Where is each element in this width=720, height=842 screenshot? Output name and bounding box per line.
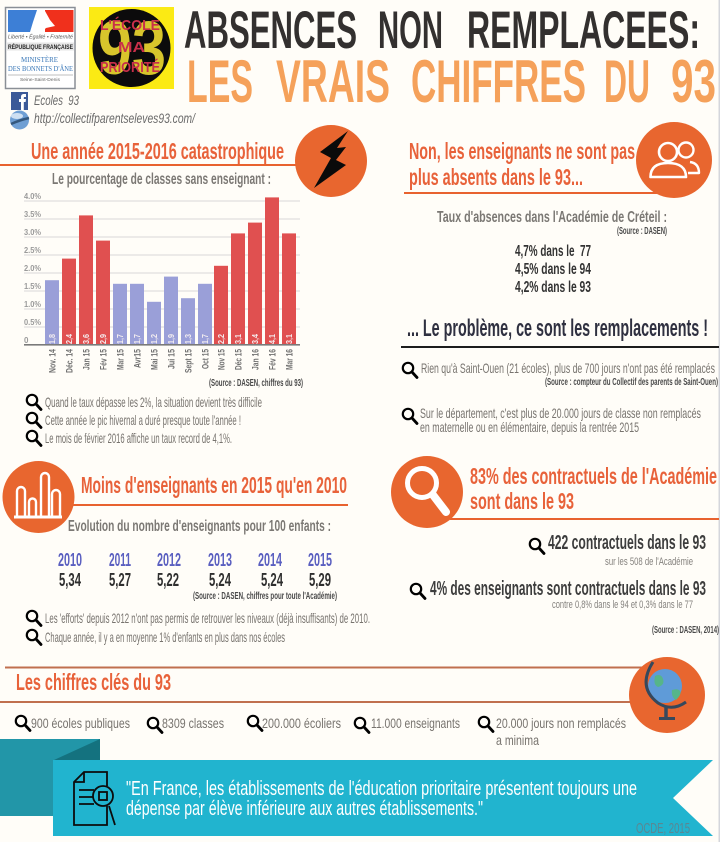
subtitle: évolution: Evolution du nombre d'enseignants pour 100 enfants : [68, 518, 331, 535]
bar chart: 3,4 [251, 334, 260, 344]
heading: chiffres clés: Les chiffres clés du 93 [16, 669, 171, 695]
banner: ocde quote [0, 739, 713, 837]
contact links: Ecoles 93 [34, 92, 79, 108]
icon: users [636, 122, 712, 198]
chart subtitle: Le pourcentage de classes sans enseignant : [52, 171, 271, 188]
bar chart: 0 [24, 336, 29, 345]
panel: contractuels [391, 456, 719, 636]
heading: non, les enseignants: plus absents dans le 93... [409, 164, 583, 190]
table: teachers per year: 2010 [58, 550, 82, 570]
bar chart: 1,7 [116, 334, 125, 344]
bullet: enfants en plus [27, 629, 285, 645]
bullet: pic hivernal: Cette année le pic hivernal a duré presque toute l'année ! [45, 412, 241, 428]
contact links: http://collectifparentseleves93.com/ [34, 110, 197, 126]
logo: l'école ma priorité: L'ÉCOLE [100, 17, 160, 34]
title: CHIFFRES [411, 48, 586, 115]
panel: une année catastrophique [0, 125, 367, 446]
title: VRAIS [276, 48, 390, 115]
table: teachers per year [58, 550, 332, 590]
panel: non, pas plus absents [401, 122, 719, 435]
table: teachers per year: 5,24 [209, 570, 231, 590]
bar chart: Jan 15 [82, 348, 92, 370]
bar chart: 2.5% [24, 246, 41, 255]
logo: ministère: MINISTÈRE [21, 56, 58, 64]
icon: bars [2, 461, 74, 533]
bar chart: 2,9 [99, 334, 108, 344]
bar chart: 2.0% [24, 264, 41, 273]
heading: moins d'enseignants: Moins d'enseignants en 2015 qu'en 2010 [81, 472, 347, 498]
stat: écoles: 900 écoles publiques [31, 715, 130, 731]
bar chart: Fév 16 [268, 349, 278, 370]
bar chart: 0.5% [24, 318, 41, 327]
stat: écoliers [248, 715, 341, 731]
bar chart: Mar 16 [284, 349, 296, 370]
absence rates: 4,2% dans le 93 [515, 279, 591, 296]
absence rates: 4,7% dans le 77 [515, 243, 591, 260]
bar chart: Déc 15 [234, 349, 244, 370]
logo: l'école ma priorité: PRIORITÉ [100, 59, 160, 76]
logo: ministère [6, 8, 75, 88]
absence rates [515, 243, 591, 296]
bullet: efforts [27, 610, 370, 626]
logo: l'école ma priorité: 93 [98, 6, 166, 91]
title [184, 1, 716, 115]
stat: 4% contractuels [411, 578, 706, 611]
contact links [10, 92, 197, 130]
table: teachers per year: 2014 [258, 550, 282, 570]
chart source: (Source : DASEN, chiffres du 93) [209, 378, 303, 389]
bar chart: 1.5% [24, 282, 41, 291]
table: teachers per year: 2015 [308, 550, 332, 570]
bullet: pic hivernal [27, 412, 241, 428]
quote text: dépense par élève inférieure aux autres établissements." [126, 798, 483, 820]
bar chart: Fév 15 [98, 348, 110, 370]
bullet: février 2016 [27, 430, 232, 446]
bullet: février 2016: Le mois de février 2016 affiche un taux record de 4,1%. [45, 430, 232, 446]
title: DU [604, 48, 650, 115]
bar chart: 3,1 [234, 334, 243, 344]
bar chart: Déc. 14 [64, 348, 76, 373]
title: LES [187, 48, 253, 115]
bar chart: 2,2 [217, 334, 226, 344]
table: teachers per year: 2012 [157, 550, 181, 570]
bar chart: 1,7 [201, 334, 210, 344]
bar chart: Mar 15 [116, 349, 126, 370]
stat: jours non remplacés: 20.000 jours non remplacés [496, 715, 626, 731]
table: teachers per year: 5,29 [309, 570, 331, 590]
bullet: efforts: Les 'efforts' depuis 2012 n'ont pas permis de retrouver les niveaux (déjà insuffisants) de 2010. [45, 610, 370, 626]
absence rates: 4,5% dans le 94 [515, 261, 591, 278]
table: teachers per year: 2011 [109, 550, 131, 570]
stat: classes: 8309 classes [162, 715, 224, 731]
bar chart [24, 192, 300, 373]
logo: l'école ma priorité: MA [118, 39, 145, 56]
bar chart: Sept 15 [184, 348, 194, 373]
bar chart: Avr15 [132, 348, 144, 368]
stat: enseignants: 11.000 enseignants [371, 715, 460, 731]
icon: magnifier [391, 456, 463, 528]
heading: non, les enseignants [409, 138, 635, 190]
bar chart: 3,6 [82, 334, 91, 344]
table: teachers per year: 2013 [208, 550, 232, 570]
stat: écoliers: 200.000 écoliers [262, 715, 341, 731]
stat: classes [148, 715, 224, 732]
bar chart: 2,4 [65, 334, 74, 344]
stat: jours non remplacés: a minima [496, 732, 539, 748]
bar chart: 3.0% [24, 228, 41, 237]
bar chart: 3,1 [285, 334, 294, 344]
icon: lightning [295, 125, 367, 197]
bullet: taux 2% [27, 394, 262, 410]
bar chart: Oct 15 [200, 349, 212, 369]
icon: globe [629, 657, 705, 733]
bar chart: Nov. 14 [48, 348, 58, 373]
table: teachers per year: 5,22 [157, 570, 179, 590]
logo: ministère: RÉPUBLIQUE FRANÇAISE [8, 43, 73, 51]
quote text [126, 778, 637, 820]
bar chart: Jan 16 [250, 349, 262, 370]
title: ABSENCES [184, 1, 357, 60]
bar chart: 1,9 [167, 334, 176, 344]
source: dasen: (Source : DASEN) [617, 226, 667, 237]
bar chart: Nov 15 [216, 349, 228, 370]
panel: chiffres clés [0, 657, 705, 748]
stat: enseignants [355, 715, 460, 732]
bar chart: 1.0% [24, 300, 41, 309]
stat: jours non remplacés [479, 715, 626, 748]
bullet: département [403, 405, 701, 435]
table: teachers per year: 5,27 [109, 570, 131, 590]
bar chart: 4.0% [24, 192, 41, 201]
bar chart: Mai 15 [150, 348, 160, 370]
bullet: taux 2%: Quand le taux dépasse les 2%, la situation devient très difficile [45, 394, 262, 410]
heading: 83% [470, 463, 717, 514]
bar chart: 1,7 [133, 334, 142, 344]
logo: ministère: Liberté • Égalité • Fraternité [8, 34, 73, 40]
panel: moins d'enseignants [2, 461, 370, 645]
heading: 83%: sont dans le 93 [470, 488, 574, 514]
bar chart: 1,8 [48, 334, 57, 344]
logo: ministère: DES BONNETS D'ÂNE [8, 65, 73, 73]
table: teachers per year: 5,34 [59, 570, 81, 590]
title: NON [378, 1, 443, 60]
bullet: saint-ouen [403, 360, 718, 388]
source: ocde: OCDE, 2015 [636, 820, 690, 837]
heading: une année: Une année 2015-2016 catastrophique [31, 138, 284, 164]
bar chart: 3.5% [24, 210, 41, 219]
bar chart: 1,2 [150, 334, 159, 344]
stat: 422 contractuels [530, 532, 706, 568]
logo: ministère: Seine-Saint-Denis [20, 77, 61, 82]
table: teachers per year: 5,24 [261, 570, 283, 590]
bar chart: Jui 15 [166, 348, 178, 369]
stat: écoles [16, 715, 130, 731]
source: académie: (Source : DASEN, chiffres pour toute l'Académie) [193, 591, 337, 602]
icon: document search [74, 772, 115, 825]
bullet: enfants en plus: Chaque année, il y a en moyenne 1% d'enfants en plus dans nos écoles [45, 629, 285, 645]
bar chart: 1,3 [184, 334, 193, 344]
bar chart: 4,1 [268, 334, 277, 344]
